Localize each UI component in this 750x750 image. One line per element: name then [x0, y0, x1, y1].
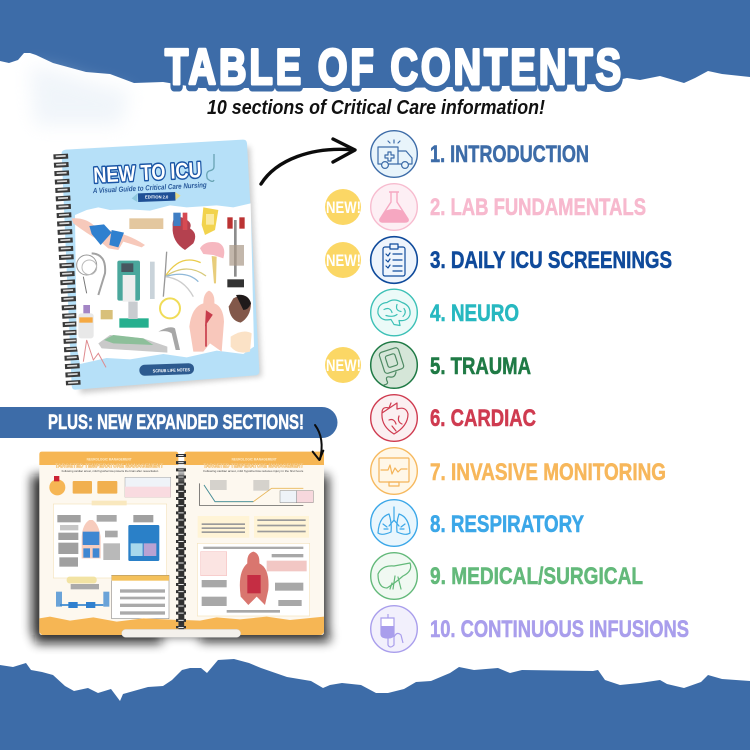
section 9: medical/surgical: 9. MEDICAL/SURGICAL [430, 563, 643, 590]
left page: TARGETED TEMPERATURE MANAGEMENT [55, 464, 164, 470]
icon: liver [371, 553, 417, 599]
torn blue footer band [0, 659, 750, 750]
temperature line chart [199, 480, 313, 505]
skin patch [231, 331, 252, 353]
gauze strip [129, 218, 163, 229]
icon: anatomical heart [371, 395, 417, 441]
section 5: trauma: 5. TRAUMA [430, 353, 531, 380]
publisher logo pill: SCRUB LIFE NOTES [153, 367, 190, 373]
syringe [150, 262, 155, 299]
section 3: daily icu screenings: 3. DAILY ICU SCREENINGS [430, 247, 672, 274]
center spiral [166, 454, 196, 628]
book cover: New to ICU [61, 140, 262, 393]
left therapy box [53, 501, 167, 578]
icon: clipboard [371, 237, 417, 283]
multilumen catheter [160, 252, 206, 318]
right anatomy box [197, 543, 310, 616]
section 8: respiratory [371, 500, 584, 546]
small fluid bag [101, 310, 113, 319]
left lower devices [56, 577, 109, 608]
new badge: lab fundamentals: NEW! [326, 198, 361, 217]
section 1: introduction: 1. INTRODUCTION [430, 141, 589, 168]
intubated patient head [229, 295, 251, 323]
left flow row [49, 476, 171, 497]
new badge: daily screenings: NEW! [326, 251, 361, 270]
section 2: lab fundamentals: 2. LAB FUNDAMENTALS [430, 194, 646, 221]
section 1: introduction [371, 131, 589, 177]
heart illustration [173, 213, 195, 250]
right middle boxes [198, 516, 309, 538]
curved arrow to spread [313, 425, 323, 460]
ventilator machine [117, 261, 149, 328]
torn blue header band [0, 0, 750, 125]
icon: lungs [371, 500, 417, 546]
edition ribbon: EDITION 2.0 [145, 195, 169, 200]
prone patient on bed [98, 335, 167, 353]
left page [39, 452, 178, 635]
section 7: invasive monitoring: 7. INVASIVE MONITORING [430, 459, 666, 486]
section 9: medical/surgical [371, 553, 643, 599]
new badge: trauma: NEW! [326, 356, 361, 375]
icon: brain [371, 289, 417, 336]
section 8: respiratory: 8. RESPIRATORY [430, 511, 584, 538]
cover title: A Visual Guide to Critical Care Nursing [92, 180, 207, 195]
banner: plus new expanded sections: PLUS: NEW EXPANDED SECTIONS! [48, 411, 304, 434]
spread shadow [32, 475, 330, 643]
cover title [91, 157, 207, 195]
catheter coil and tubing [77, 253, 105, 295]
icon: blood bag [371, 342, 417, 388]
right page [184, 452, 324, 635]
book shadow [75, 147, 262, 393]
right page: TARGETED TEMPERATURE MANAGEMENT [203, 464, 304, 470]
icon: ambulance [371, 131, 417, 177]
subtitle: 10 sections of Critical Care information! [207, 97, 545, 119]
white torn panel [75, 203, 254, 364]
new badge: trauma [325, 347, 361, 383]
right page: NEUROLOGIC MANAGEMENT [232, 458, 277, 462]
waveform [83, 340, 106, 367]
stethoscope icon [207, 154, 214, 181]
section 7: invasive monitoring [371, 448, 666, 494]
section 3: daily icu screenings [371, 237, 672, 283]
page tab pill [122, 629, 241, 637]
left page: NEUROLOGIC MANAGEMENT [87, 458, 132, 462]
section 10: continuous infusions [371, 606, 689, 652]
section 4: neuro [371, 289, 519, 336]
left page: Following cardiac arrest, mild hypothermia protects the brain after resuscitation [62, 469, 159, 473]
section 6: cardiac: 6. CARDIAC [430, 405, 536, 432]
section 6: cardiac [371, 395, 536, 441]
title: TABLE OF CONTENTS [165, 40, 621, 95]
section 5: trauma [371, 342, 531, 388]
title: TABLE OF CONTENTS [165, 43, 621, 98]
patient with cooling pads [72, 218, 145, 250]
yellow drainage bag [202, 207, 218, 235]
publisher logo pill [139, 363, 194, 376]
brain [200, 242, 224, 283]
new badge: daily screenings [325, 242, 361, 278]
icon: iv bag [371, 606, 417, 652]
right page: Following cardiac arrest, mild hypothermia reduces injury in the first hours [203, 469, 304, 473]
spiral binding [61, 154, 73, 386]
anatomy torso [189, 291, 224, 352]
laryngoscope [158, 327, 180, 350]
icon: bedside monitor [371, 448, 417, 494]
cover title: NEW TO ICU [93, 157, 202, 188]
open book spread [32, 425, 330, 643]
section 4: neuro: 4. NEURO [430, 300, 519, 327]
banner: plus new expanded sections [0, 407, 338, 438]
small fluid bottle [78, 305, 94, 338]
section 2: lab fundamentals [371, 184, 646, 230]
left warning table [112, 575, 169, 619]
icon: flask [371, 184, 417, 230]
edition ribbon [132, 192, 181, 202]
new badge: lab fundamentals [325, 189, 361, 225]
arrow to section list [261, 139, 355, 184]
ECMO machine on pole [227, 217, 245, 287]
cover page [62, 140, 259, 390]
